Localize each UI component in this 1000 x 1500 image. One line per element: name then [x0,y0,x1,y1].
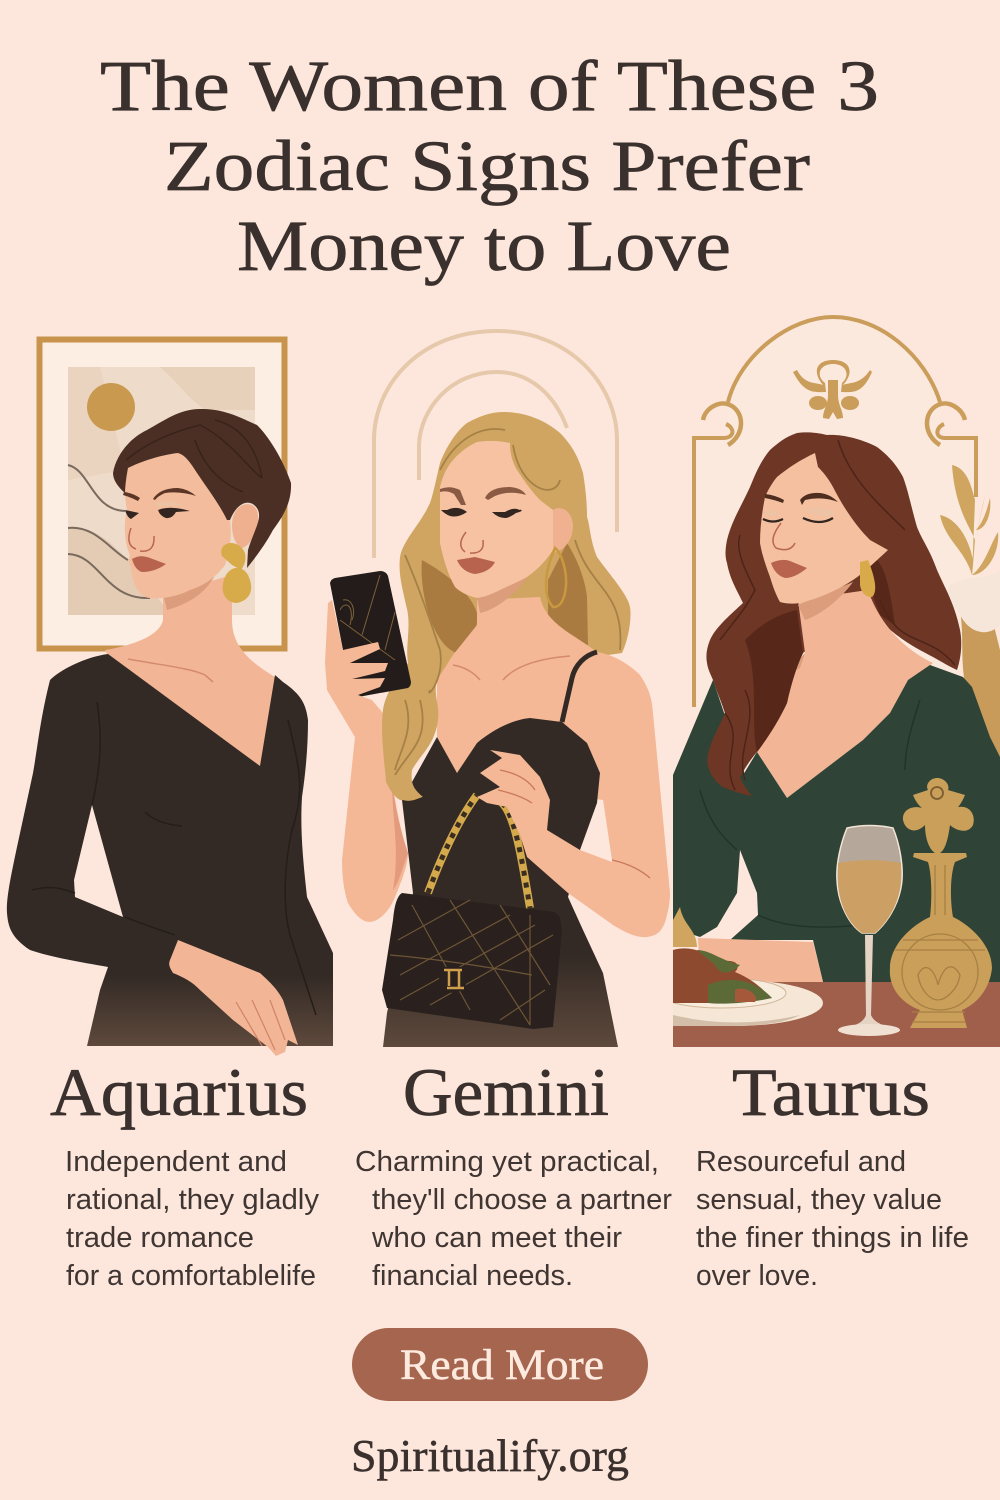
Gemini text: who can meet their [371,1222,622,1254]
woman: dress strap [562,652,597,722]
Taurus heading: Taurus [732,1054,930,1130]
woman: hair strands [126,420,262,492]
woman: finger creases [236,1000,285,1050]
woman: hair dark underlayer [745,610,803,752]
wine glass [837,826,902,1036]
panel: Aquarius illustration [7,340,333,1056]
read more button: Read More [400,1342,604,1389]
woman: collarbone [128,659,213,682]
woman: ear [232,504,258,548]
woman: dress [673,665,1000,1000]
gold lid [673,907,697,947]
woman: hair strands [720,440,955,790]
framed art [40,340,284,648]
plate of food [673,948,823,1026]
woman: eyes, brows, nose and lips [440,487,526,574]
woman: neck and chest [105,575,280,775]
woman: dress creases [700,700,920,927]
woman: forearm [698,938,823,982]
Aquarius text: rational, they gladly [66,1184,320,1216]
panel: Gemini illustration [325,331,670,1047]
read more button [352,1328,648,1401]
woman: face [125,453,231,598]
woman: earring [860,560,875,597]
ornate arch panel [693,317,977,720]
table [673,982,1000,1047]
woman: left arm [327,690,408,922]
Gemini text [355,1146,672,1292]
woman: eyes, brows, nose and lips [123,488,196,572]
arches [374,331,617,558]
gap under arm [580,800,612,862]
woman: earring [221,543,251,603]
gap between arm and body [74,805,123,917]
woman: hair back [400,412,631,680]
Taurus text [696,1146,969,1292]
Aquarius text: for a comfortablelife [66,1260,316,1292]
Taurus text: the finer things in life [696,1222,969,1254]
woman: right hair dark underlayer [870,560,895,624]
woman: dress [7,654,333,1046]
ornament [793,360,872,419]
flowers [960,610,995,632]
woman: hoop earring [546,548,566,607]
phone [330,571,411,697]
woman: hand creases [498,770,650,878]
woman: hair strands [395,429,620,775]
woman: hair dark underlayer [422,543,588,653]
woman: neck shadow [164,575,215,610]
plant and vase [940,465,1000,760]
woman: hair [113,409,291,568]
woman: neck shadow [477,577,527,613]
woman: face [440,441,553,598]
title: The Women of These 3 [100,46,879,126]
woman: neck and chest [757,590,933,798]
Gemini text: financial needs. [372,1260,573,1292]
handbag [382,795,562,1029]
Gemini text: they'll choose a partner [372,1184,672,1216]
woman: face [760,453,888,604]
Gemini heading: Gemini [403,1054,609,1130]
woman: bag hand and forearm [477,750,670,937]
woman: hair back [706,432,961,713]
woman: collarbone [453,656,570,680]
title [100,46,879,286]
title: Money to Love [237,206,731,286]
woman: hair lock front [382,640,438,801]
vase [960,610,1000,760]
woman: hand [169,940,298,1056]
Aquarius text: Independent and [65,1146,287,1178]
Aquarius text [65,1146,320,1292]
woman: phone hand [325,600,388,737]
Taurus text: sensual, they value [696,1184,942,1216]
woman: chest, shoulder and right arm [437,597,670,937]
woman: arm shadow [392,780,408,890]
woman: dress creases [32,702,316,1015]
Taurus text: Resourceful and [696,1146,906,1178]
decanter [890,778,992,1028]
title: Zodiac Signs Prefer [164,126,810,206]
panel: Taurus illustration [647,317,1000,1047]
site name: Spiritualify.org [351,1430,629,1481]
Aquarius text: trade romance [66,1222,254,1254]
woman: hair lower curls [707,680,788,796]
Taurus text: over love. [696,1260,818,1292]
woman: dress [383,718,618,1047]
plant leaves [940,465,998,577]
woman: ear [553,508,573,553]
woman: neck shadows [796,582,853,670]
woman: eyes, brows, nose and lips [763,493,838,578]
Gemini text: Charming yet practical, [355,1146,659,1178]
Aquarius heading: Aquarius [50,1054,308,1130]
